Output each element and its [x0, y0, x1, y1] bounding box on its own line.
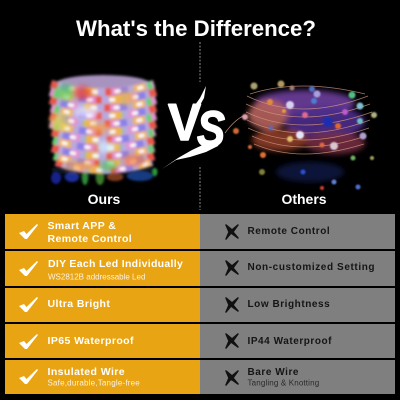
comparison panel: others [200, 214, 395, 394]
row: waterproof [5, 324, 200, 358]
cross icon [226, 261, 238, 275]
row: insulated wire: Safe,durable,Tangle-free [48, 378, 140, 388]
check icon [19, 224, 38, 239]
row: IP44 [200, 324, 395, 358]
cross icon [226, 334, 238, 348]
VS lettering: S [197, 101, 225, 157]
VS emblem [162, 86, 225, 169]
check icon [19, 297, 38, 312]
row: DIY: DIY Each Led Individually [48, 258, 183, 270]
row: DIY [5, 251, 200, 286]
row: bare wire [200, 360, 395, 394]
dashed center divider top [199, 42, 201, 82]
row: non-customized: Non-customized Setting [248, 262, 375, 273]
coil reflection [51, 168, 158, 185]
row: low brightness: Low Brightness [248, 299, 330, 310]
row: insulated wire: Insulated Wire [48, 366, 125, 378]
row: remote control [200, 214, 395, 249]
coil colour patches [51, 84, 146, 171]
row: IP44: IP44 Waterproof [248, 336, 332, 347]
photo: our rope light coil [50, 75, 158, 185]
row: DIY: WS2812B addressable Led [48, 272, 145, 282]
cross icon [226, 371, 238, 385]
check icon [19, 334, 38, 349]
fairy coil wires [246, 86, 372, 154]
row: bare wire: Bare Wire [248, 367, 299, 378]
fairy coil glow [248, 90, 365, 182]
label: Ours: Ours [88, 191, 121, 207]
fairy lead wire [225, 115, 246, 133]
row: remote control: Remote Control [248, 226, 330, 237]
row: smart app: Smart APP & [48, 220, 116, 232]
upper streak [190, 86, 206, 116]
row: smart app [5, 214, 200, 249]
lightning streak [162, 136, 222, 169]
cross icon [226, 225, 238, 239]
fairy coil LEDs [233, 80, 377, 190]
check icon [19, 369, 38, 384]
VS lettering [168, 94, 225, 157]
check icon [19, 261, 38, 276]
row: bare wire: Tangling & Knotting [248, 378, 319, 388]
row: non-customized [200, 251, 395, 286]
cross icon [226, 298, 238, 312]
photo: other fairy light coil [225, 80, 377, 190]
row: waterproof: IP65 Waterproof [48, 335, 134, 347]
row: ultra bright: Ultra Bright [48, 298, 110, 310]
title: What's the Difference? [76, 16, 316, 41]
VS lettering: V [168, 94, 201, 152]
row: insulated wire [5, 360, 200, 394]
label: Others: Others [281, 191, 327, 207]
comparison panel: ours [5, 214, 200, 394]
coil rope turns [50, 75, 156, 170]
row: low brightness [200, 288, 395, 322]
row: ultra bright [5, 288, 200, 322]
dashed center divider bottom [199, 167, 201, 210]
row: smart app: Remote Control [48, 233, 132, 245]
